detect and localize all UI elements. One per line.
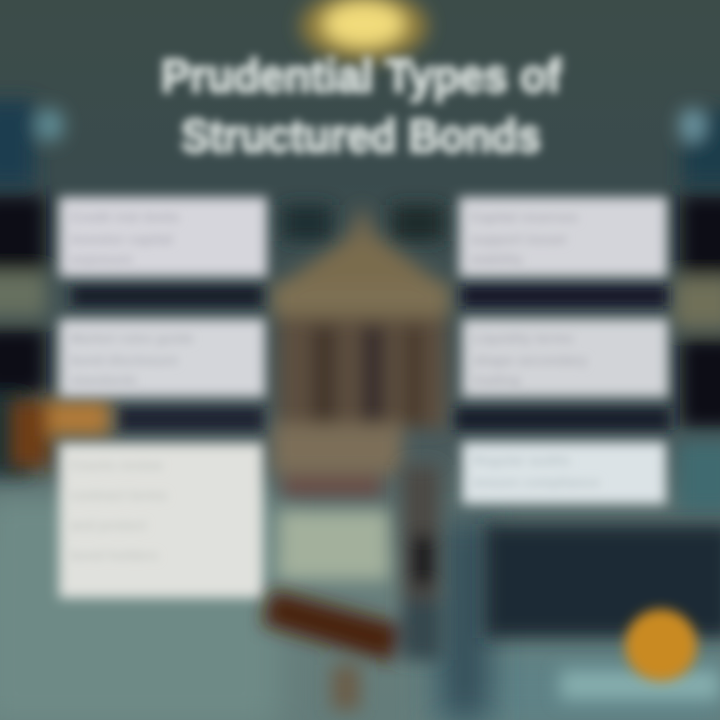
panel: bottom left: Courts review [70, 457, 163, 473]
panel: middle right [462, 319, 668, 397]
title [161, 49, 561, 162]
panel: middle right: Liquidity terms [473, 330, 574, 346]
panel: bottom right: Regular audits [473, 452, 570, 468]
central building [272, 205, 450, 496]
icon: gavel [262, 465, 442, 710]
title: Prudential Types of [161, 49, 561, 102]
panel: middle left [59, 319, 265, 397]
icon: orange coin [625, 609, 697, 681]
panel: top right [459, 197, 667, 277]
icon: glowing lamp [300, 0, 428, 62]
lower plinth [278, 510, 390, 580]
panel: middle left: Market rules guide [70, 330, 194, 346]
right side dark wall [674, 108, 720, 512]
panel: top left [59, 197, 267, 277]
panel: top right: support issuer [470, 231, 568, 247]
panel: middle right: shape secondary [473, 352, 588, 368]
left side dark wall [0, 100, 64, 475]
panel: top right: stability [470, 251, 523, 267]
panel: bottom left: bond holders [70, 547, 159, 563]
panel: middle left: bond disclosure [70, 352, 178, 368]
dark block lower right [484, 524, 720, 638]
orange accent block [10, 400, 110, 468]
title: Structured Bonds [181, 109, 541, 162]
panel: middle left: standards [70, 372, 137, 388]
panel: top left: Credit risk limits [70, 209, 180, 225]
dark patches beside roof [282, 205, 444, 241]
panel: bottom left: and protect [70, 517, 147, 533]
panel: bottom left: contract terms [70, 487, 167, 503]
panel: bottom left [59, 443, 263, 598]
panel: bottom right [462, 442, 666, 504]
dark strips between panels [72, 286, 670, 430]
panel: top left: investor capital [70, 231, 173, 247]
panel: top right: Capital reserves [470, 209, 578, 225]
panel: middle right: trading [473, 372, 520, 388]
panel: bottom right: ensure compliance [473, 474, 600, 490]
panel: top left: exposure [70, 251, 132, 267]
